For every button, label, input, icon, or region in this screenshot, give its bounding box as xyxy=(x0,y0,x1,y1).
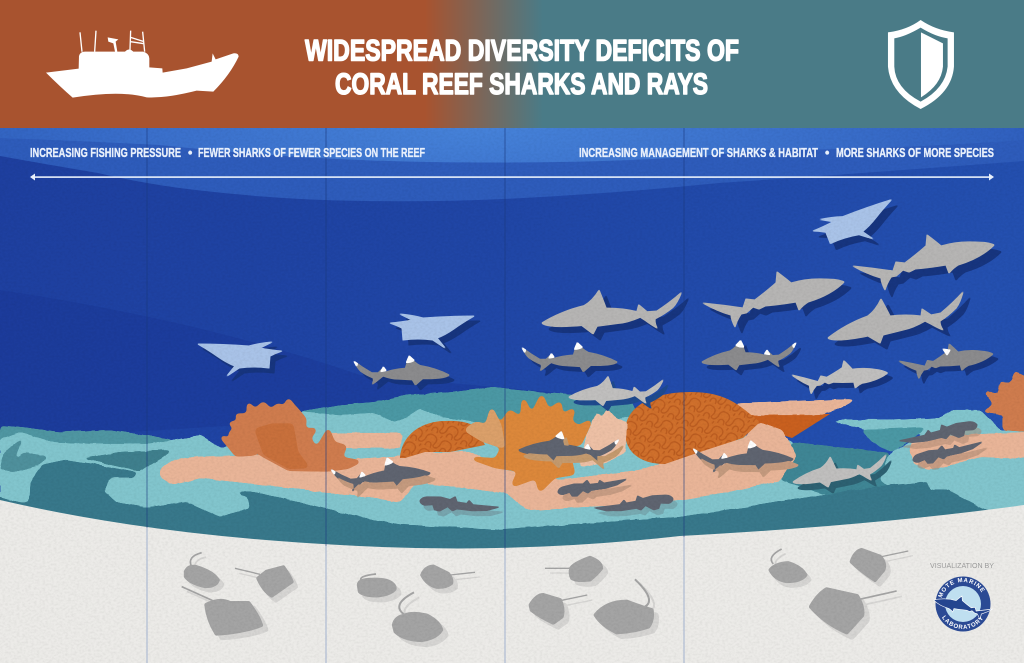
water background xyxy=(0,128,1024,540)
reef sharks xyxy=(331,419,989,520)
light shark xyxy=(790,354,893,408)
nurse shark xyxy=(898,419,983,454)
nurse shark xyxy=(557,472,633,506)
fishing pressure caption: INCREASING FISHING PRESSURE xyxy=(30,146,181,160)
stingrays: second and third columns xyxy=(358,557,657,646)
title: WIDESPREAD DIVERSITY DEFICITS OF xyxy=(305,34,739,68)
reef shark xyxy=(331,443,436,510)
title: CORAL REEF SHARKS AND RAYS xyxy=(335,68,708,101)
nurse shark xyxy=(912,435,989,474)
double-headed arrow xyxy=(30,174,994,180)
shark xyxy=(703,272,851,333)
grey shark xyxy=(522,332,623,387)
column dividers xyxy=(147,128,684,663)
stingrays: fourth column xyxy=(770,549,913,637)
header band xyxy=(0,0,1024,128)
credit text: VISUALIZATION BY xyxy=(930,561,994,570)
grey shark xyxy=(354,345,455,400)
shark xyxy=(541,277,688,349)
light shark xyxy=(568,367,668,419)
icon: shield xyxy=(888,20,954,109)
coral: brain corals xyxy=(400,392,760,464)
reef background layers xyxy=(0,387,1024,570)
dark teal reef base xyxy=(0,460,1024,570)
grey shark xyxy=(702,331,801,382)
management caption: • xyxy=(825,146,829,160)
sand seabed xyxy=(0,500,1024,663)
coral: right orange branching xyxy=(982,371,1024,432)
stingrays on sand xyxy=(182,549,913,646)
logo: Mote Marine Laboratory: LABORATORY xyxy=(942,615,982,630)
grey shark xyxy=(898,341,998,389)
manta xyxy=(390,314,480,353)
blacktip shark xyxy=(793,451,891,496)
shark xyxy=(828,292,970,349)
reef shark xyxy=(518,419,623,481)
manta xyxy=(810,198,907,261)
logo: Mote Marine Laboratory: MOTE MARINE xyxy=(938,578,985,598)
coral: left orange branching xyxy=(222,400,358,470)
stingrays: first column xyxy=(182,553,296,638)
reef shark xyxy=(693,428,799,490)
shark xyxy=(853,235,1001,297)
manta xyxy=(198,342,287,381)
fishing pressure caption: • xyxy=(188,146,192,160)
fishing pressure caption: FEWER SHARKS OF FEWER SPECIES ON THE REEF xyxy=(198,146,425,160)
orange cone under plate xyxy=(743,414,830,438)
coral: centre orange branching xyxy=(467,397,590,490)
management caption: INCREASING MANAGEMENT OF SHARKS & HABITAT xyxy=(579,146,818,160)
nurse shark xyxy=(420,495,503,519)
fishing pressure caption xyxy=(30,146,425,160)
icon: fishing boat xyxy=(46,31,239,98)
coral: peach branching xyxy=(580,408,627,467)
logo: Mote Marine Laboratory xyxy=(934,576,993,632)
upper shark school xyxy=(354,235,1001,419)
title xyxy=(305,34,739,101)
nurse shark xyxy=(594,493,678,520)
manta rays xyxy=(198,198,907,381)
peach reef flats xyxy=(160,399,1024,510)
